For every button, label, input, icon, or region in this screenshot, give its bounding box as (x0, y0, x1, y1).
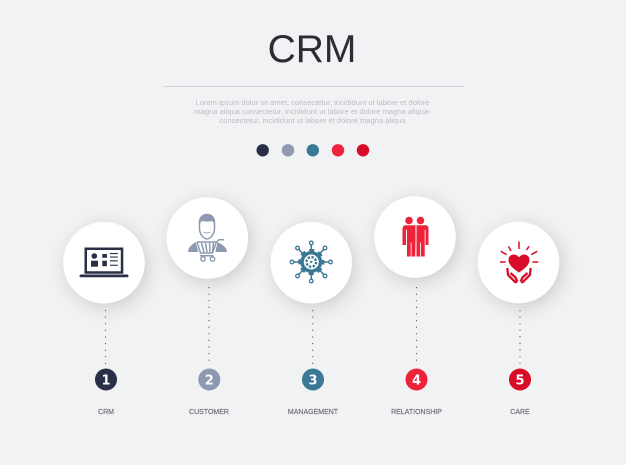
icon: gear network (290, 241, 332, 283)
label CRM: CRM (98, 409, 114, 416)
connector 5 (519, 310, 521, 364)
panel: step 5 care (478, 222, 559, 416)
panel: step 1 CRM (63, 222, 145, 416)
label CUSTOMER: CUSTOMER (189, 409, 229, 416)
number badge 1: 1 (101, 373, 111, 388)
circle 4 (374, 196, 456, 278)
panel: step 4 relationship (374, 196, 456, 416)
number badge 2 (198, 368, 220, 390)
description text: magna aliqua consectetur, incididunt ut labore et dolore magna aliqua- (194, 107, 431, 116)
icon: laptop (80, 248, 128, 277)
circle 3 (271, 222, 352, 303)
number badge 4 (406, 368, 428, 390)
panel: step 3 management (271, 222, 352, 416)
icon: two people (402, 217, 428, 256)
description text (194, 98, 431, 125)
number badge 2: 2 (205, 373, 214, 388)
connector 3 (312, 310, 314, 364)
icon: heart in hands with rays (500, 242, 538, 282)
number badge 3: 3 (308, 373, 318, 388)
icon: customer with shopping cart (188, 214, 227, 261)
description text: consectetur, incididunt ut labore et dolore magna aliqua (219, 116, 406, 125)
connector 2 (208, 287, 210, 364)
circle 2 (167, 197, 248, 279)
number badge 1 (95, 368, 117, 390)
label CARE: CARE (510, 409, 530, 416)
connector 4 (416, 287, 418, 364)
colour dots legend (256, 144, 369, 156)
connector 1 (104, 310, 106, 364)
number badge 5: 5 (515, 373, 525, 388)
title: CRM (268, 28, 356, 71)
number badge 3 (302, 368, 324, 390)
number badge 4: 4 (412, 373, 421, 388)
label MANAGEMENT: MANAGEMENT (288, 409, 339, 416)
circle 1 (63, 222, 145, 303)
description text: Lorem ipsum dolor sit amet, consectetur, incididunt ut labore et dolore (195, 98, 430, 107)
circle 5 (478, 222, 559, 303)
number badge 5 (509, 368, 531, 390)
label RELATIONSHIP: RELATIONSHIP (391, 409, 442, 416)
panel: step 2 customer (167, 197, 248, 416)
